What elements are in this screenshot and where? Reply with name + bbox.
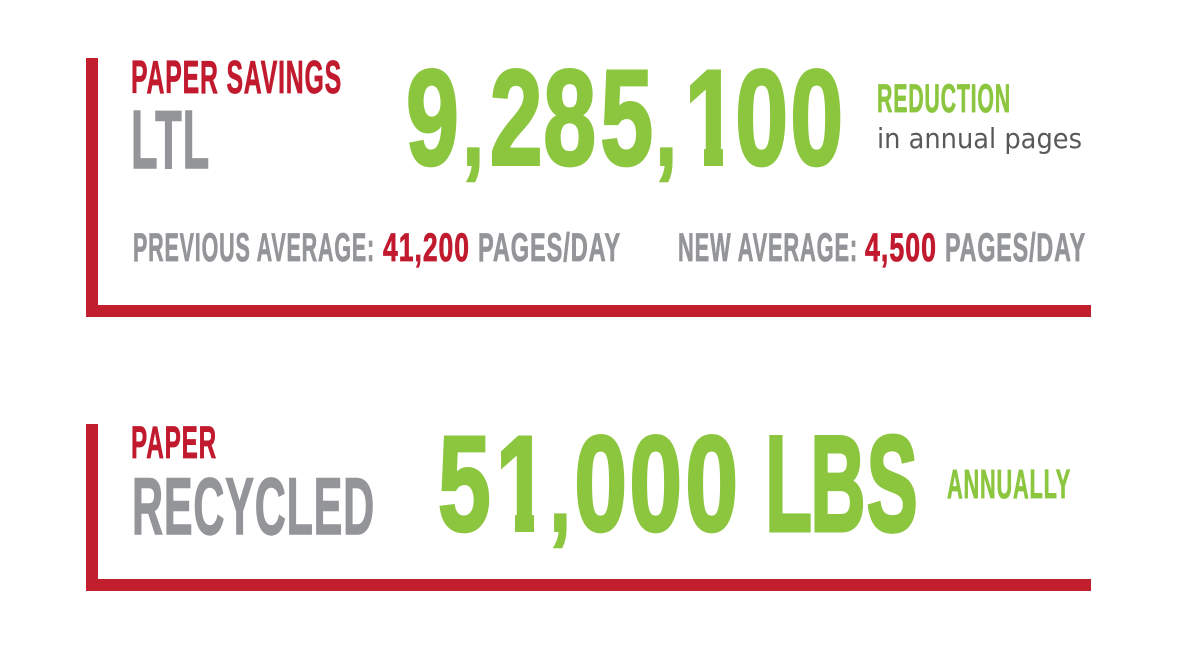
big number: 51,000 lbs: 5	[438, 408, 491, 559]
big number: 51,000 lbs: L	[765, 408, 812, 560]
big number: 9,285,100: 8	[543, 42, 596, 193]
panel: paper recycled	[86, 408, 1091, 591]
big number: 9,285,100: 0	[735, 42, 788, 193]
big number: 51,000 lbs: 0	[574, 408, 627, 559]
big number: 9,285,100: 5	[600, 42, 653, 193]
big number: 9,285,100	[406, 42, 843, 193]
subheading: recycled: RECYCLED	[132, 462, 375, 552]
big number: 9,285,100: ,	[463, 71, 483, 188]
big number: 51,000 lbs: 0	[685, 408, 738, 559]
panel: paper savings LTL	[86, 42, 1091, 317]
stat: previous average: PREVIOUS AVERAGE:	[133, 226, 375, 270]
big number: 51,000 lbs: 1	[496, 408, 549, 559]
panel bracket: recycled	[86, 424, 1091, 591]
stat: new average: 4,500	[865, 226, 937, 270]
subheading: LTL: LTL	[131, 93, 210, 186]
label: reduction: REDUCTION	[877, 77, 1011, 121]
big number: 51,000 lbs: ,	[550, 437, 570, 554]
heading: paper savings: PAPER SAVINGS	[131, 51, 342, 103]
big number: 51,000 lbs: S	[867, 408, 918, 560]
panel bracket: LTL	[86, 58, 1091, 317]
caption: in annual pages: in annual pages	[877, 122, 1082, 155]
big number: 51,000 lbs: B	[810, 408, 865, 560]
big number: 51,000 lbs	[438, 408, 918, 560]
stat: previous average: 41,200	[383, 226, 470, 270]
stat: new average: PAGES/DAY	[945, 226, 1086, 270]
big number: 9,285,100: 1	[685, 42, 738, 193]
big number: 9,285,100: ,	[656, 71, 676, 188]
label: annually: ANNUALLY	[947, 461, 1071, 507]
big number: 9,285,100: 2	[490, 42, 543, 193]
stat: previous average: PAGES/DAY	[478, 226, 621, 270]
stat: new average: NEW AVERAGE:	[678, 226, 858, 270]
big number: 9,285,100: 0	[790, 42, 843, 193]
big number: 9,285,100: 9	[406, 42, 459, 193]
heading: paper: PAPER	[131, 417, 217, 468]
big number: 51,000 lbs: 0	[629, 408, 682, 559]
